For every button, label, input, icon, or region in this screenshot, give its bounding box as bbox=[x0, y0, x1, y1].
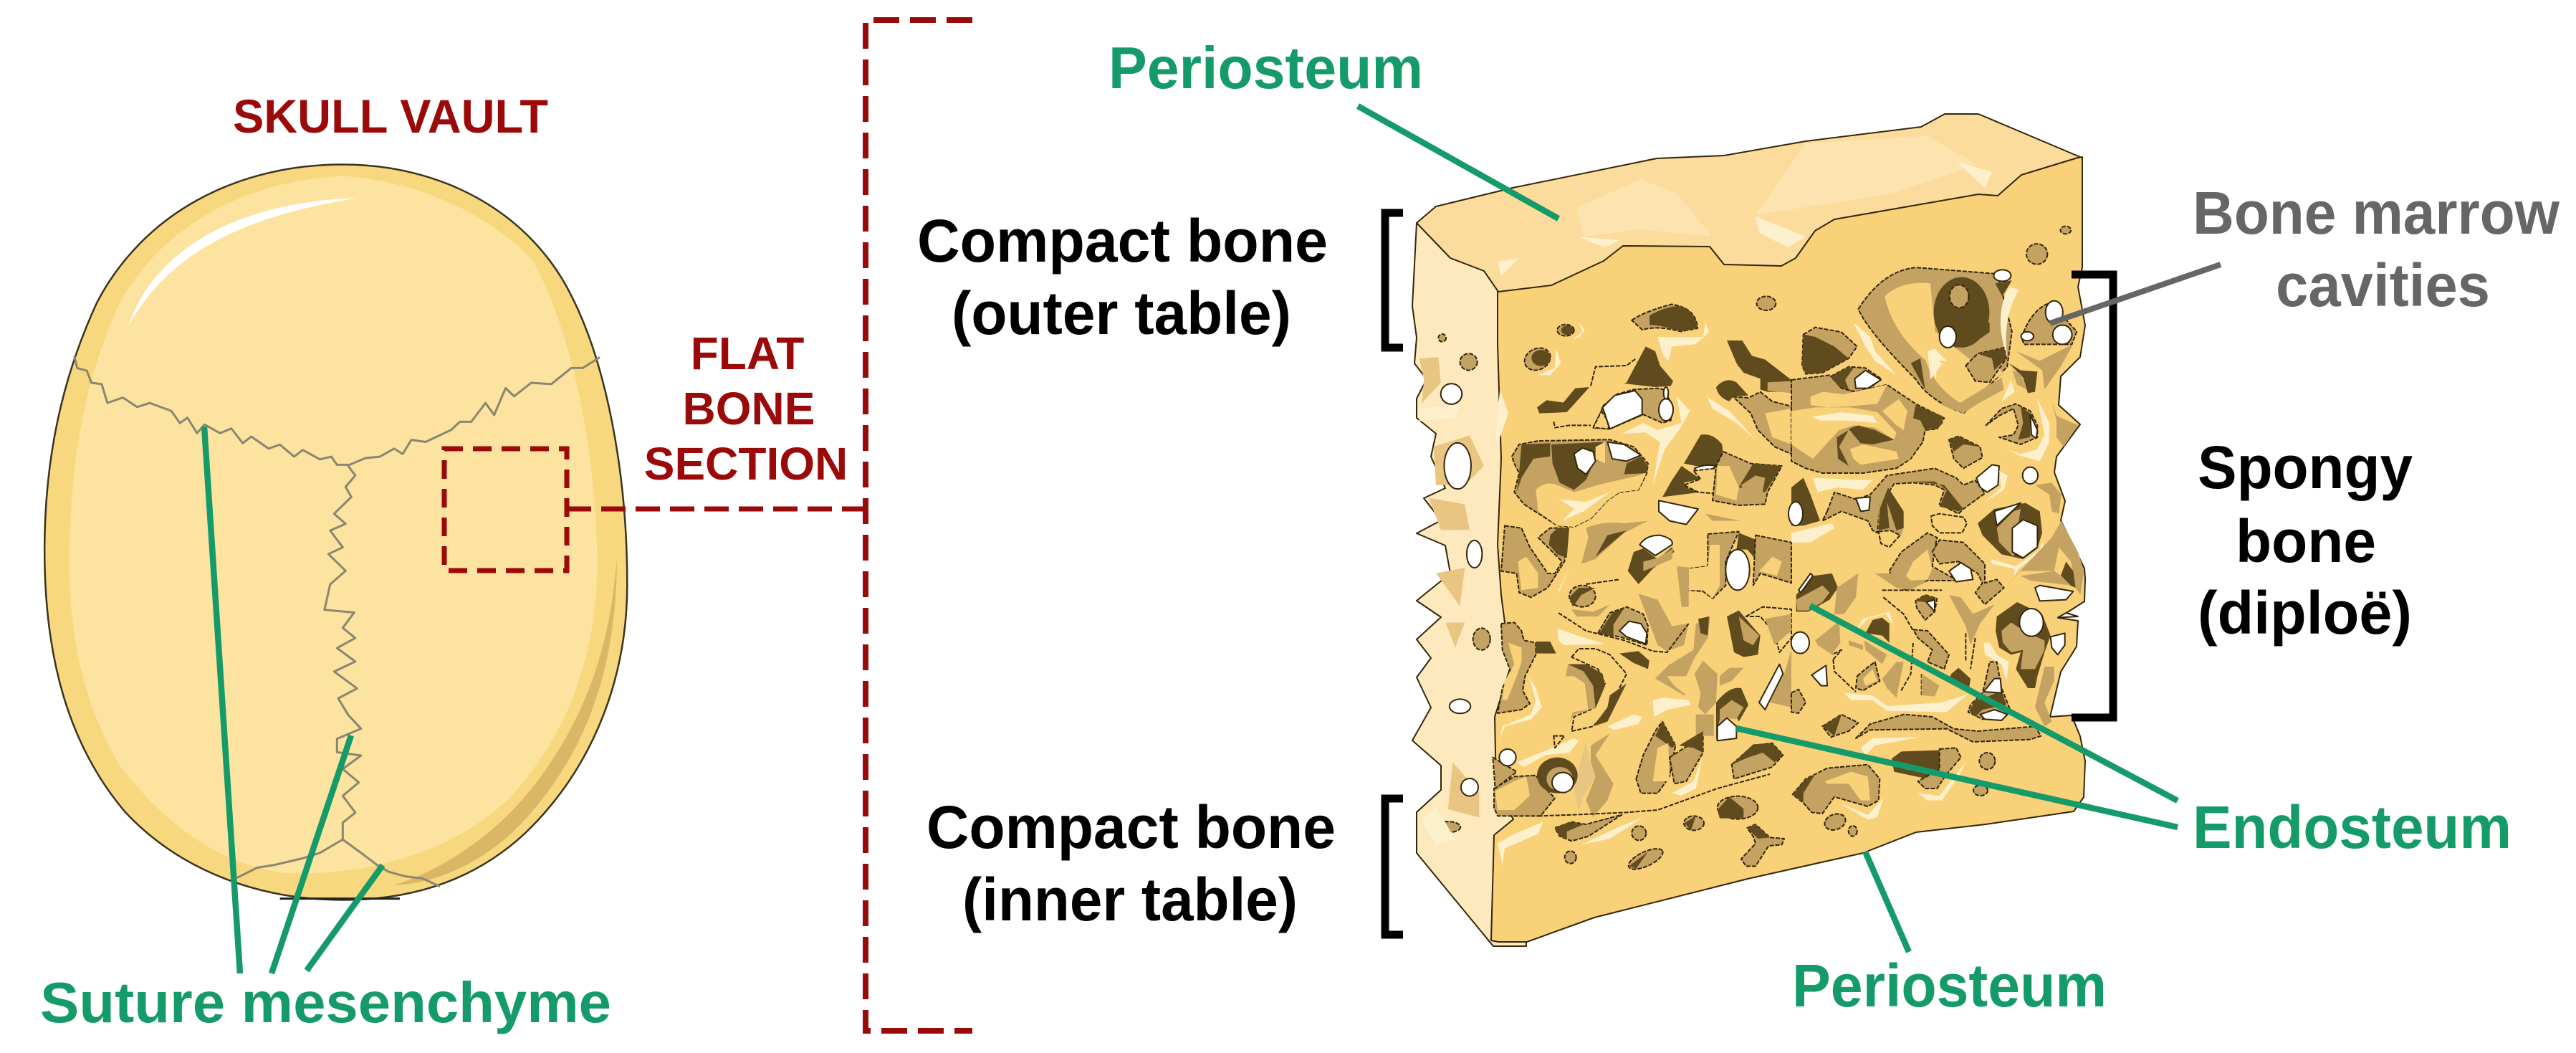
leader lines: endosteum bbox=[1736, 606, 2178, 827]
heading: flat bone section: SECTION bbox=[644, 438, 848, 490]
bracket: spongy bone bbox=[2072, 275, 2113, 718]
label: periosteum bottom: Periosteum bbox=[1792, 952, 2107, 1019]
label: compact bone inner table bbox=[927, 794, 1336, 933]
label: suture mesenchyme: Suture mesenchyme bbox=[40, 971, 611, 1034]
label: periosteum top: Periosteum bbox=[1109, 34, 1423, 101]
label: spongy bone diploe: bone bbox=[2236, 508, 2376, 575]
skull highlight bbox=[128, 198, 357, 325]
heading: flat bone section: BONE bbox=[683, 383, 815, 434]
sagittal suture bbox=[325, 464, 361, 839]
heading: flat bone section bbox=[644, 328, 848, 490]
label: compact bone inner table: (inner table) bbox=[962, 866, 1298, 933]
illustration: flat bone block bbox=[1412, 114, 2085, 946]
label: compact bone outer table: (outer table) bbox=[952, 280, 1291, 347]
bottom edge bbox=[280, 897, 400, 900]
heading: skull vault: SKULL VAULT bbox=[233, 90, 548, 143]
bracket: outer table bbox=[1385, 213, 1403, 348]
bracket: inner table bbox=[1385, 799, 1403, 935]
leader line: bone marrow cavities bbox=[2050, 265, 2221, 323]
dashed selection square bbox=[444, 449, 567, 571]
label: compact bone outer table bbox=[917, 207, 1328, 347]
spongy cavities: lower right and compact pits bbox=[1791, 573, 2078, 837]
spongy cavities: centre left bbox=[1495, 323, 1791, 607]
label: spongy bone diploe bbox=[2198, 434, 2413, 647]
green leader lines: suture mesenchyme bbox=[204, 427, 383, 973]
label: bone marrow cavities: Bone marrow bbox=[2193, 179, 2560, 247]
heading: flat bone section: FLAT bbox=[691, 328, 804, 379]
left face of block bbox=[1412, 215, 1526, 946]
illustration: skull vault bbox=[44, 165, 627, 900]
label: compact bone outer table: Compact bone bbox=[917, 207, 1328, 275]
label: compact bone inner table: Compact bone bbox=[927, 794, 1336, 861]
label: bone marrow cavities bbox=[2193, 179, 2560, 319]
top face of block bbox=[1417, 114, 2080, 292]
dashed connector and bracket bbox=[567, 20, 972, 1031]
top face light patches bbox=[1576, 179, 1713, 237]
label: endosteum: Endosteum bbox=[2193, 794, 2512, 861]
spongy cavities: upper band above 450 bbox=[1632, 227, 2078, 413]
label: spongy bone diploe: Spongy bbox=[2198, 434, 2413, 501]
skull outline and rim bbox=[44, 165, 627, 900]
skull inner surface bbox=[70, 176, 597, 873]
spongy cavities: lower left and compact pits bbox=[1493, 579, 1791, 873]
left face lower bbox=[1422, 540, 1490, 845]
leader line: periosteum top bbox=[1358, 106, 1558, 219]
label: spongy bone diploe: (diploë) bbox=[2198, 579, 2412, 647]
spongy cavities: centre right bbox=[1789, 323, 2084, 604]
left face struts and gaps bbox=[1419, 334, 1484, 530]
lambdoid suture bbox=[237, 839, 440, 887]
label: bone marrow cavities: cavities bbox=[2276, 252, 2490, 319]
leader line: periosteum bottom bbox=[1865, 852, 1909, 952]
coronal suture bbox=[75, 356, 600, 464]
front face of block bbox=[1491, 157, 2085, 942]
skull shadow crescent bbox=[394, 558, 617, 885]
